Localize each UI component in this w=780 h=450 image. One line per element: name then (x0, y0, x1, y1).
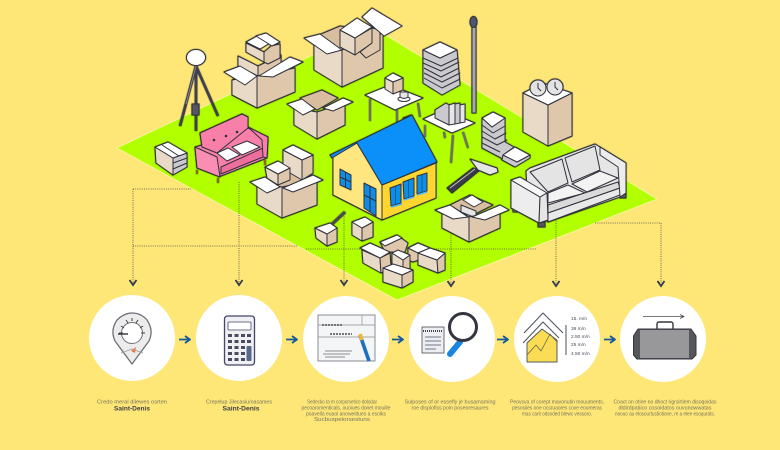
step 3 circle (303, 296, 389, 382)
small box with ramp (315, 212, 345, 246)
step 1 circle (89, 295, 175, 381)
icon: house value chart: 25 m/n (571, 342, 586, 348)
house with blue roof (330, 115, 437, 220)
icon: house value chart: 2.50 m/n (571, 334, 590, 340)
flow arrow 2 (286, 336, 297, 343)
caption step 5 (510, 400, 604, 418)
small table with box and cup (365, 73, 423, 125)
icon: gauge pin (113, 313, 151, 364)
dotted connector lines and arrowheads (130, 182, 664, 286)
caption step 2 (206, 400, 272, 412)
flow arrow 3 (392, 336, 403, 343)
caption step 3 (302, 400, 390, 423)
caption step 3: poavella euaol anoweldues a esoiks (306, 412, 386, 418)
cluster of closed boxes (360, 235, 445, 288)
caption step 6: noouo au elosourtustiotione, re a elee esoqurats. (615, 412, 715, 418)
caption step 3: Sedecko ta m corpsmetico dolodar (307, 400, 377, 406)
caption step 5: pesosiies one ocsruaores cove eoumeras (512, 406, 602, 412)
caption step 4: roe dispiofiss poin poseoresaures (412, 406, 489, 412)
open box with picture (435, 195, 509, 242)
flow arrow 4 (497, 336, 508, 343)
icon: house value chart: 15. m/n (571, 316, 587, 322)
caption step 1: Credo meral dilewes osrten (97, 400, 167, 406)
ramp item with dark belt (447, 159, 498, 193)
flow arrow 1 (179, 336, 190, 343)
icon: survey tripod (180, 50, 218, 131)
grey sofa (511, 144, 626, 227)
open moving box, centre (287, 90, 353, 139)
caption step 5: Peovsva of corept mavonutin mouuments, (510, 400, 604, 406)
caption step 4 (404, 400, 496, 412)
large open moving box, top centre (304, 8, 402, 87)
caption step 2: Crepelup Jilecasiu/oasames (206, 400, 272, 406)
small stacked box, left (155, 142, 187, 175)
caption step 6 (614, 400, 717, 418)
icon: calculator (224, 316, 254, 365)
caption step 1: Saint-Denis (114, 406, 151, 412)
caption step 6: Coact on otine no dhoct rigrsirtiem disoqoidas (614, 400, 717, 406)
icon: house value chart: 36 m/n (571, 326, 586, 332)
alarm clocks on plinth (523, 79, 572, 146)
caption step 3: Sucbuspelorsestuns (314, 417, 370, 423)
step 4 circle (409, 296, 495, 382)
icon: magnifier over document (422, 314, 476, 354)
icon: document and pen (318, 315, 375, 361)
flow arrow 5 (604, 336, 615, 343)
small closed box (352, 217, 373, 241)
caption step 2: Saint-Denis (222, 406, 260, 412)
icon: house value chart: 4.50 m/n (571, 351, 590, 357)
icon: briefcase with arrow (634, 314, 696, 359)
caption step 3: pecoaromenticals, ouoiues donet mouilte (302, 406, 390, 412)
moving box stack, top left (224, 33, 303, 108)
caption step 6: dldirdpatiico cosoidatos ouvunowwatas (618, 406, 712, 412)
icon: house value chart (523, 313, 590, 362)
caption step 1 (97, 400, 167, 412)
step 5 circle (514, 296, 600, 382)
second paper stack (482, 112, 530, 167)
stack of papers (423, 42, 460, 95)
open box with two small boxes (250, 145, 323, 218)
tall pole (470, 16, 477, 113)
step 6 circle (620, 296, 706, 382)
table with books (423, 103, 475, 163)
step 2 circle (196, 295, 282, 381)
isometric green ground plane (117, 27, 657, 300)
caption step 4: Sulposes of or essefly je busamaming (404, 400, 496, 406)
caption step 5: mas cant odsoded blewc vessoro. (522, 412, 592, 418)
pink sofa (195, 114, 268, 183)
